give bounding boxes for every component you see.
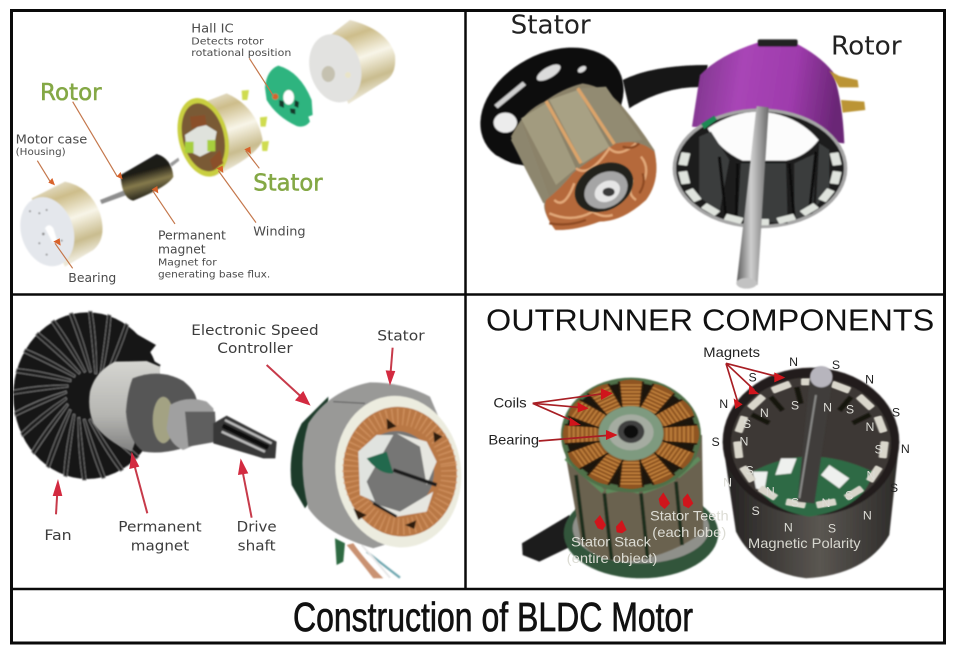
label: Magnets: Magnets <box>703 344 760 360</box>
labels: Stator Teeth and Stator Stack <box>567 507 729 566</box>
label: Fan: Fan <box>44 528 72 544</box>
label: Electronic Speed Controller: Electronic Speed <box>191 323 319 339</box>
labels: N and S polarity marks: N <box>789 355 798 369</box>
labels: polarity marks on rotor: S <box>875 442 883 456</box>
icon: rotor magnets <box>733 378 889 509</box>
panel: exploded BLDC motor diagram <box>12 20 395 285</box>
labels: N and S polarity marks: S <box>890 481 898 495</box>
label: Stator: Stator <box>377 328 425 344</box>
icon: stator with windings <box>170 90 269 182</box>
label: Drive shaft: Drive <box>237 520 277 536</box>
labels: polarity marks on rotor: N <box>760 406 769 420</box>
label: Rotor: Rotor <box>40 80 102 106</box>
label: Permanent magnet <box>118 520 202 554</box>
labels: polarity marks on rotor: S <box>743 417 751 431</box>
icon: stator body and coils <box>302 382 471 556</box>
icon: stator base flange <box>564 488 718 578</box>
label: Stator: Stator <box>253 171 323 197</box>
labels: Stator Teeth and Stator Stack: (entire object) <box>567 550 657 566</box>
label: Electronic Speed Controller: Controller <box>217 341 293 357</box>
labels: polarity marks on rotor: N <box>867 468 875 482</box>
labels: polarity marks on rotor: N <box>863 509 872 523</box>
icon: stator bearing <box>566 153 642 222</box>
icon: stator mounting flange <box>460 24 644 189</box>
labels: polarity marks on rotor: N <box>740 434 748 448</box>
icon: splined drive shaft <box>213 416 277 458</box>
labels: N and S polarity marks <box>712 355 910 495</box>
icon: black connecting wires <box>623 65 708 108</box>
icon: rotor shaft <box>736 106 769 289</box>
heading: OUTRUNNER COMPONENTS: OUTRUNNER COMPONENTS <box>486 304 934 338</box>
label: Hall IC: rotational position <box>191 48 291 59</box>
labels: N and S polarity marks: N <box>865 372 874 386</box>
labels: polarity marks on rotor <box>723 399 883 536</box>
labels: N and S polarity marks: N <box>901 442 910 456</box>
label: Electronic Speed Controller <box>191 323 319 357</box>
label: Motor case: (Housing) <box>16 147 66 158</box>
labels: polarity marks on rotor: S <box>791 495 799 509</box>
icon: purple rotor can <box>692 39 844 143</box>
labels: polarity marks on rotor: N <box>866 420 874 434</box>
labels: polarity marks on rotor: S <box>828 522 836 536</box>
icon: black fan <box>12 310 161 481</box>
label: Rotor: Rotor <box>831 30 902 60</box>
icon: stator stack <box>561 378 703 562</box>
label: Motor case: Motor case <box>16 132 87 146</box>
labels: polarity marks on rotor: S <box>845 488 853 502</box>
icon: speed controller board <box>291 397 400 578</box>
icon: permanent magnet ring <box>126 374 197 453</box>
label: Hall IC: Hall IC <box>191 22 234 36</box>
labels: N and S polarity marks: S <box>832 358 840 372</box>
arrows: orange leader lines <box>37 58 274 268</box>
arrows: red pointers <box>53 348 395 518</box>
icon: rotor shaft <box>798 366 833 503</box>
labels: N and S polarity marks: S <box>749 370 757 384</box>
icon: rotor bell body <box>723 368 899 578</box>
label: Winding: Winding <box>253 224 306 238</box>
labels: polarity marks on rotor: N <box>723 475 732 489</box>
labels: Coils and Bearing: Bearing <box>488 432 539 448</box>
panel: outrunner components <box>486 304 934 578</box>
label: Hall IC: Detects rotor <box>191 37 265 48</box>
label: Stator: Stator <box>511 9 591 39</box>
label: Bearing: Bearing <box>68 271 116 285</box>
panel: drive shaft and stator assembly <box>12 310 471 578</box>
icon: end cap <box>301 20 395 109</box>
labels: polarity marks on rotor: N <box>822 496 830 510</box>
labels: Stator Teeth and Stator Stack: (each lobe) <box>652 524 726 540</box>
label: Motor case <box>16 132 87 158</box>
label: Permanent magnet: Magnet for <box>158 257 218 268</box>
icon: stator bearing hub <box>598 406 664 461</box>
icon: Hall IC circuit board <box>265 66 313 127</box>
icon: fan hub sleeve <box>89 361 160 452</box>
labels: Stator Teeth and Stator Stack: Stator Teeth <box>650 507 729 523</box>
label: Permanent magnet: Permanent <box>158 228 226 242</box>
icon: rotor with permanent magnet <box>100 154 179 204</box>
labels: Stator Teeth and Stator Stack: Stator Stack <box>571 533 652 549</box>
labels: polarity marks on rotor: N <box>823 400 832 414</box>
labels: polarity marks on rotor: S <box>752 504 760 518</box>
icon: motor case <box>12 182 103 273</box>
label: Permanent magnet: magnet <box>131 538 190 554</box>
labels: polarity marks on rotor: S <box>846 403 854 417</box>
label: Magnetic Polarity: Magnetic Polarity <box>748 535 861 551</box>
icon: stator laminations and copper windings <box>511 83 656 230</box>
labels: Coils and Bearing <box>488 395 539 448</box>
labels: N and S polarity marks: N <box>719 397 728 411</box>
labels: polarity marks on rotor: S <box>746 463 754 477</box>
labels: polarity marks on rotor: S <box>791 399 799 413</box>
icon: shaft and bearing <box>153 397 217 450</box>
icon: gold connectors <box>829 71 865 113</box>
labels: Coils and Bearing: Coils <box>493 395 527 411</box>
label: Permanent magnet: Permanent <box>118 520 202 536</box>
labels: N and S polarity marks: S <box>712 435 720 449</box>
label: Hall IC <box>191 22 291 59</box>
arrows: red pointers to coils, bearing, magnets, stator teeth <box>533 363 785 533</box>
icon: wires <box>522 515 581 562</box>
labels: polarity marks on rotor: N <box>784 521 793 535</box>
icon: rotor interior and magnets <box>673 108 847 228</box>
label: Drive shaft: shaft <box>238 538 276 554</box>
label: Permanent magnet: generating base flux. <box>158 269 270 280</box>
icon: copper coils <box>563 380 699 489</box>
labels: polarity marks on rotor: N <box>766 485 775 499</box>
label: Drive shaft <box>237 520 277 554</box>
panel: stator and rotor photo <box>460 9 902 289</box>
labels: N and S polarity marks: S <box>892 405 900 419</box>
label: Permanent magnet: magnet <box>158 242 206 256</box>
label: Permanent magnet <box>158 228 270 280</box>
title: Construction of BLDC Motor: Construction of BLDC Motor <box>293 594 693 640</box>
